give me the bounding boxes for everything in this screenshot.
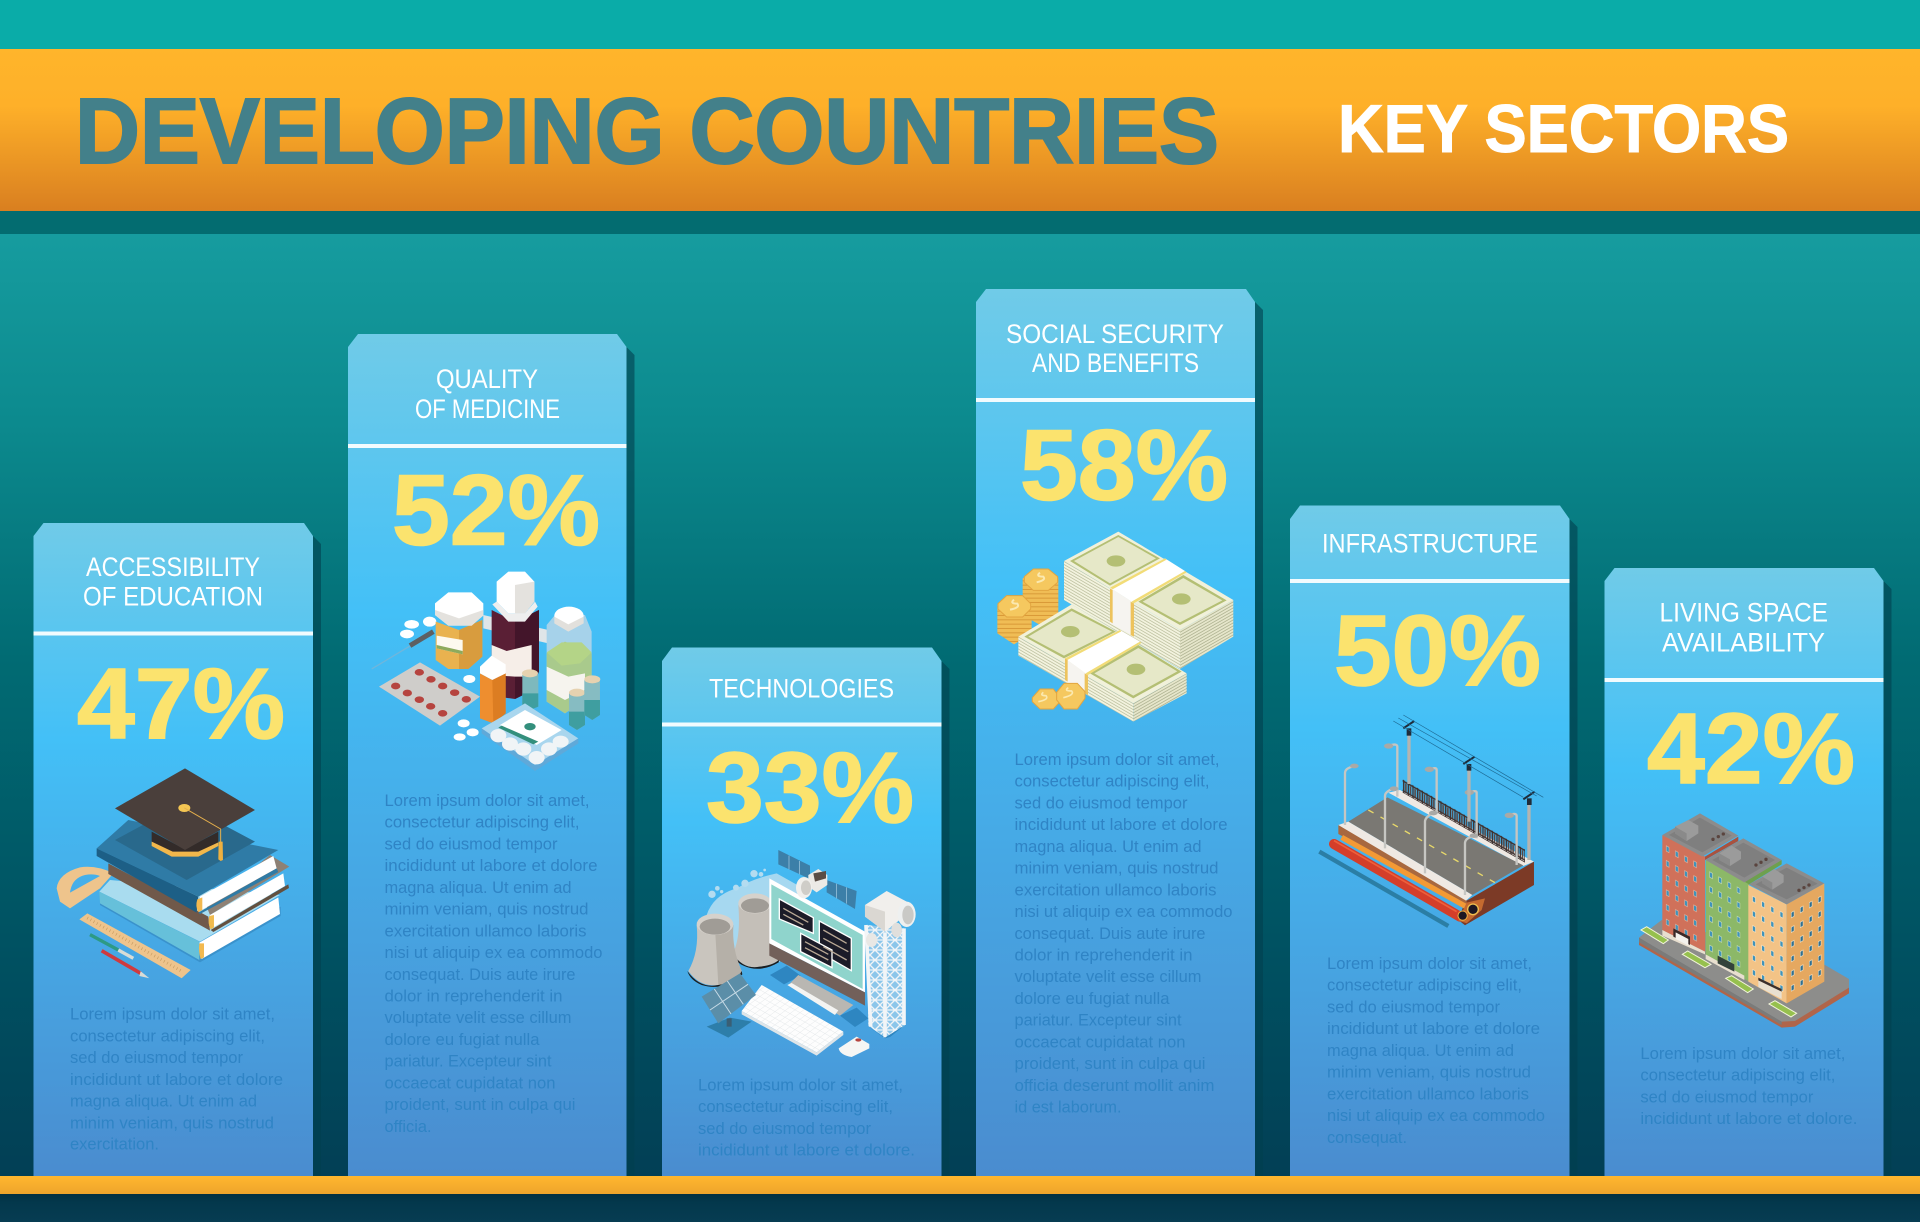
body text: Lorem ipsum dolor sit amet, bbox=[1640, 1044, 1845, 1063]
body text: minim veniam, quis nostrud bbox=[1014, 859, 1218, 878]
body text: voluptate velit esse cillum bbox=[1014, 967, 1202, 986]
body text: dolore eu fugiat nulla bbox=[384, 1030, 540, 1049]
body text: Lorem ipsum dolor sit amet, bbox=[70, 1005, 275, 1024]
body text: minim veniam, quis nostrud bbox=[384, 900, 588, 919]
body text: Lorem ipsum dolor sit amet, bbox=[698, 1076, 903, 1094]
body text: nisi ut aliquip ex ea commodo bbox=[384, 943, 602, 962]
body text: magna aliqua. Ut enim ad bbox=[1327, 1041, 1514, 1060]
bar shadow band bbox=[0, 211, 1920, 234]
body text: sed do eiusmod tempor bbox=[1014, 793, 1188, 812]
footer dark band bbox=[0, 1194, 1920, 1222]
panel: accessibility of education bbox=[34, 523, 321, 1176]
body text: sed do eiusmod tempor bbox=[1327, 997, 1500, 1016]
body text: incididunt ut labore et dolore bbox=[1014, 815, 1228, 834]
body text: exercitation ullamco laboris bbox=[1327, 1084, 1529, 1103]
heading: OF MEDICINE bbox=[415, 394, 560, 424]
percentage: 52% bbox=[392, 455, 600, 567]
body text: magna aliqua. Ut enim ad bbox=[70, 1092, 257, 1111]
body text: incididunt ut labore et dolore. bbox=[698, 1141, 915, 1160]
body text: dolor in reprehenderit in bbox=[1014, 946, 1192, 964]
body text bbox=[1640, 1044, 1857, 1128]
body text: Lorem ipsum dolor sit amet, bbox=[384, 791, 590, 810]
heading: INFRASTRUCTURE bbox=[1322, 528, 1538, 558]
percentage: 58% bbox=[1020, 410, 1228, 522]
percentage: 42% bbox=[1647, 693, 1855, 805]
body text: consectetur adipiscing elit, bbox=[1327, 976, 1522, 995]
icon: stacks of money and coins bbox=[997, 532, 1233, 722]
panel: technologies bbox=[662, 648, 950, 1176]
body text: nisi ut aliquip ex ea commodo bbox=[1014, 902, 1232, 921]
heading bbox=[415, 364, 560, 424]
body text: officia. bbox=[384, 1117, 432, 1136]
icon: medicine bottles and pills bbox=[372, 572, 600, 771]
heading: AND BENEFITS bbox=[1032, 348, 1199, 378]
body text: magna aliqua. Ut enim ad bbox=[384, 878, 572, 897]
body text: consectetur adipiscing elit, bbox=[1014, 772, 1210, 791]
heading: QUALITY bbox=[436, 364, 538, 394]
body text: exercitation ullamco laboris bbox=[1014, 880, 1216, 899]
body text: Lorem ipsum dolor sit amet, bbox=[1327, 954, 1532, 973]
panel: social security and benefits bbox=[976, 289, 1263, 1176]
top teal band bbox=[0, 0, 1920, 49]
icon: technology, monitor, towers and satellite bbox=[687, 850, 916, 1057]
heading: AVAILABILITY bbox=[1662, 628, 1825, 658]
heading bbox=[1006, 319, 1224, 378]
body text bbox=[70, 1005, 283, 1154]
body text: consectetur adipiscing elit, bbox=[1640, 1066, 1835, 1085]
body text: dolore eu fugiat nulla bbox=[1014, 989, 1170, 1008]
body text: incididunt ut labore et dolore. bbox=[1640, 1109, 1857, 1128]
background bbox=[0, 234, 1920, 1176]
body text bbox=[1014, 750, 1232, 1116]
heading: SOCIAL SECURITY bbox=[1006, 319, 1224, 349]
body text bbox=[1327, 954, 1545, 1147]
percentage: 47% bbox=[77, 648, 285, 760]
body text bbox=[698, 1076, 915, 1160]
body text: sed do eiusmod tempor bbox=[698, 1119, 871, 1138]
icon: apartment buildings bbox=[1639, 813, 1849, 1028]
body text: consequat. bbox=[1327, 1128, 1407, 1147]
icon: road with lamps and pipes bbox=[1319, 715, 1543, 926]
percentage: 50% bbox=[1334, 595, 1541, 707]
heading: LIVING SPACE bbox=[1660, 598, 1828, 628]
body text: occaecat cupidatat non bbox=[384, 1073, 556, 1092]
body text bbox=[384, 791, 602, 1136]
body text: nisi ut aliquip ex ea commodo bbox=[1327, 1106, 1545, 1125]
body text: dolor in reprehenderit in bbox=[384, 986, 562, 1006]
body text: sed do eiusmod tempor bbox=[70, 1048, 243, 1067]
subtitle: KEY SECTORS bbox=[1338, 91, 1789, 167]
body text: voluptate velit esse cillum bbox=[384, 1008, 572, 1027]
heading bbox=[83, 552, 263, 612]
body text: id est laborum. bbox=[1014, 1098, 1122, 1116]
title banner bbox=[0, 49, 1920, 211]
body text: pariatur. Excepteur sint bbox=[1014, 1011, 1182, 1030]
body text: occaecat cupidatat non bbox=[1014, 1032, 1186, 1051]
body text: proident, sunt in culpa qui bbox=[384, 1095, 576, 1114]
body text: exercitation ullamco laboris bbox=[384, 921, 586, 940]
heading: ACCESSIBILITY bbox=[86, 552, 260, 582]
body text: consectetur adipiscing elit, bbox=[384, 813, 580, 832]
body text: sed do eiusmod tempor bbox=[384, 834, 558, 853]
heading: OF EDUCATION bbox=[83, 582, 263, 612]
icon: books and graduation cap bbox=[57, 768, 289, 978]
bottom orange strip bbox=[0, 1176, 1920, 1194]
body text: incididunt ut labore et dolore bbox=[70, 1070, 283, 1089]
heading bbox=[1660, 598, 1828, 658]
percentage: 33% bbox=[706, 732, 914, 844]
panel: infrastructure bbox=[1290, 506, 1578, 1176]
body text: magna aliqua. Ut enim ad bbox=[1014, 837, 1202, 856]
body text: exercitation. bbox=[70, 1134, 159, 1154]
panel: quality of medicine bbox=[348, 334, 634, 1176]
title: DEVELOPING COUNTRIES bbox=[75, 79, 1219, 183]
body text: consectetur adipiscing elit, bbox=[698, 1097, 893, 1116]
body text: pariatur. Excepteur sint bbox=[384, 1052, 552, 1071]
body text: sed do eiusmod tempor bbox=[1640, 1087, 1814, 1106]
body text: incididunt ut labore et dolore bbox=[1327, 1019, 1540, 1038]
body text: consequat. Duis aute irure bbox=[384, 965, 576, 984]
body text: consectetur adipiscing elit, bbox=[70, 1026, 265, 1045]
heading: TECHNOLOGIES bbox=[709, 674, 894, 704]
body text: consequat. Duis aute irure bbox=[1014, 924, 1206, 943]
body text: incididunt ut labore et dolore bbox=[384, 856, 598, 875]
body text: Lorem ipsum dolor sit amet, bbox=[1014, 750, 1220, 769]
body text: minim veniam, quis nostrud bbox=[1327, 1063, 1531, 1082]
body text: officia deserunt mollit anim bbox=[1014, 1076, 1214, 1095]
body text: minim veniam, quis nostrud bbox=[70, 1113, 274, 1132]
panel: living space availability bbox=[1604, 568, 1892, 1176]
body text: proident, sunt in culpa qui bbox=[1014, 1054, 1206, 1073]
